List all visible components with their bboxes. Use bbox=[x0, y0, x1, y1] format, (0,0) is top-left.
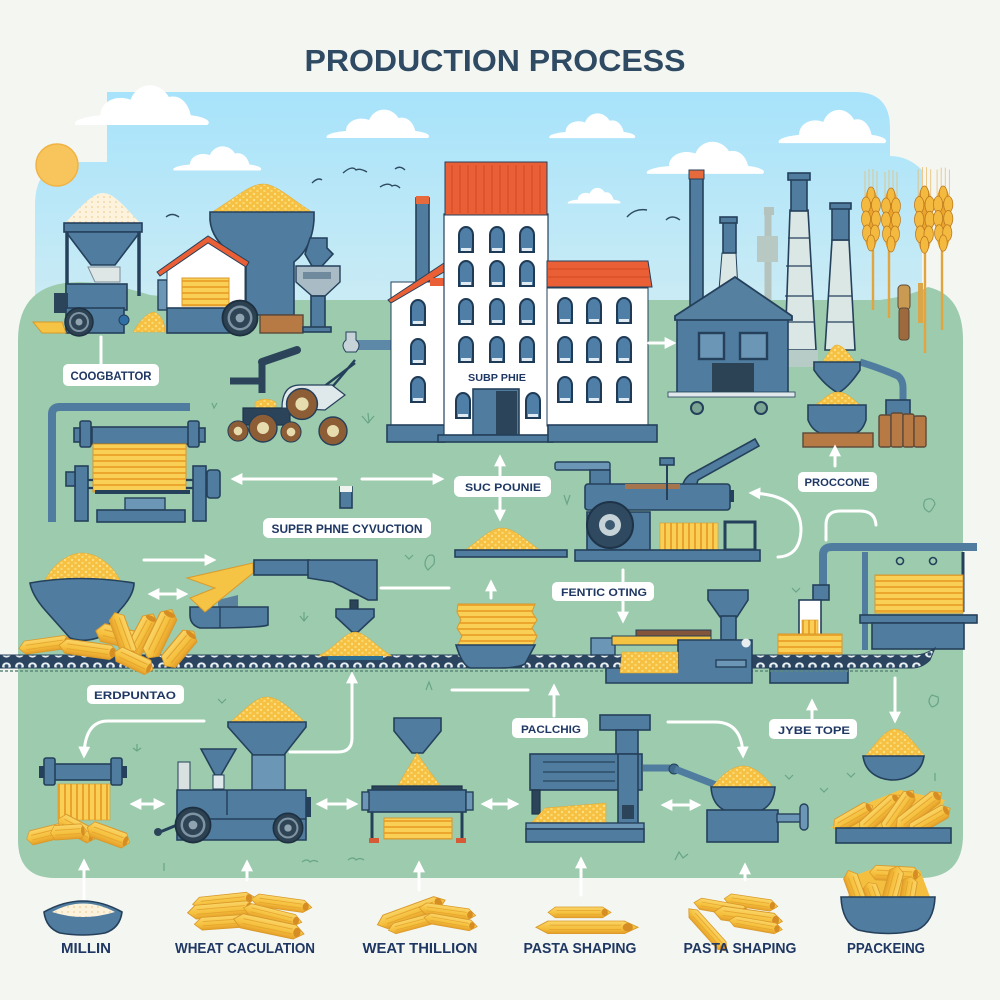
arrows: press to bowl bbox=[664, 722, 743, 805]
machine: grain bowl and pasta pile bbox=[18, 553, 201, 677]
flour pile bbox=[65, 193, 140, 223]
machine: noodle roller bbox=[25, 758, 132, 850]
bowl of grain bbox=[863, 729, 925, 780]
icon: sun bbox=[36, 144, 78, 186]
label: super phne cyvuction: SUPER PHNE CYVUCTION bbox=[272, 522, 422, 536]
label: jybe tope bbox=[769, 702, 857, 739]
machine: flat press with hopper bbox=[362, 718, 473, 843]
arrow: curved to noodle roller bbox=[84, 721, 204, 755]
label: paclchig bbox=[512, 718, 588, 738]
label: fentic oting: FENTIC OTING bbox=[561, 587, 647, 599]
step: pasta shaping one: PASTA SHAPING bbox=[524, 940, 636, 957]
step: pasta shaping two bbox=[684, 893, 796, 957]
label: proccone: PROCCONE bbox=[804, 477, 870, 489]
arrows: bowl row bbox=[144, 560, 491, 598]
machine: overhead pipe and rack bbox=[770, 547, 977, 683]
arrow: double train-press bbox=[319, 802, 355, 806]
sky panel bbox=[35, 92, 922, 320]
building: main factory block bbox=[387, 162, 657, 442]
sign: SUBP PHIE bbox=[468, 373, 526, 384]
machine: press with large wheel bbox=[455, 439, 760, 561]
pasta tray bbox=[830, 786, 954, 843]
step: pasta shaping one bbox=[524, 907, 638, 957]
label: jybe tope: JYBE TOPE bbox=[778, 725, 850, 737]
step: wheat caculation: WHEAT CACULATION bbox=[175, 940, 315, 957]
title: PRODUCTION PROCESS bbox=[304, 43, 686, 78]
birds bbox=[166, 167, 680, 220]
arrows: curved right bbox=[752, 493, 876, 557]
step: pasta shaping two: PASTA SHAPING bbox=[684, 940, 796, 957]
chimney bbox=[416, 198, 429, 288]
door bbox=[473, 389, 519, 435]
conveyor belt bbox=[0, 648, 935, 671]
panel: green ground bbox=[18, 282, 963, 878]
step: wheat caculation bbox=[175, 891, 315, 957]
step: weat thillion: WEAT THILLION bbox=[362, 940, 478, 957]
arrows: middle row bbox=[234, 478, 441, 480]
machine: roller press with pipe bbox=[52, 407, 220, 522]
chimneys and towers bbox=[689, 170, 855, 367]
label: paclchig: PACLCHIG bbox=[521, 724, 581, 736]
machine: chute with hopper bbox=[187, 560, 392, 660]
arrow: double roller-train bbox=[133, 802, 162, 806]
machine: flour hopper cart bbox=[33, 193, 165, 336]
machine: log tractor with pipe bbox=[228, 332, 392, 445]
machine: sheet press bbox=[526, 715, 716, 842]
step: weat thillion bbox=[362, 893, 478, 957]
label: coogbattor: COOGBATTOR bbox=[70, 369, 152, 383]
icon: wheat stalks bbox=[862, 167, 953, 353]
machine: grain bowl stand bbox=[707, 766, 808, 842]
right wing bbox=[547, 288, 648, 426]
arrows: press row bbox=[452, 687, 554, 804]
arrow: train up to conveyor bbox=[290, 675, 352, 752]
building: blue shed bbox=[668, 277, 795, 414]
arrow: building to shed bbox=[649, 342, 673, 344]
label: fentic oting bbox=[552, 570, 654, 620]
step: ppackeing: PPACKEING bbox=[847, 940, 925, 957]
step: ppackeing bbox=[841, 864, 935, 957]
clouds bbox=[75, 85, 886, 204]
machine: grain bowls with barrels bbox=[803, 345, 926, 447]
step: millin: MILLIN bbox=[61, 940, 111, 957]
label: suc pounie bbox=[454, 458, 551, 518]
small grass marks bbox=[133, 403, 938, 871]
label: coogbattor bbox=[63, 337, 159, 386]
label: erdpuntao bbox=[87, 685, 184, 704]
left wing bbox=[391, 282, 444, 425]
label: suc pounie: SUC POUNIE bbox=[465, 482, 541, 494]
label: super phne cyvuction bbox=[263, 518, 431, 538]
machine: pasta stack on bowl bbox=[456, 604, 537, 668]
label: erdpuntao: ERDPUNTAO bbox=[94, 690, 177, 702]
arrows: bottom inputs bbox=[84, 860, 745, 905]
label: proccone bbox=[798, 448, 877, 492]
step: millin bbox=[44, 901, 122, 957]
icon: small canister bbox=[340, 486, 352, 508]
tower bbox=[444, 214, 548, 436]
machine: extruder bbox=[591, 590, 752, 683]
machine: silo with house bbox=[157, 184, 340, 336]
machine: train mill bbox=[154, 697, 311, 843]
arrow: conveyor down to bowl bbox=[894, 678, 896, 720]
